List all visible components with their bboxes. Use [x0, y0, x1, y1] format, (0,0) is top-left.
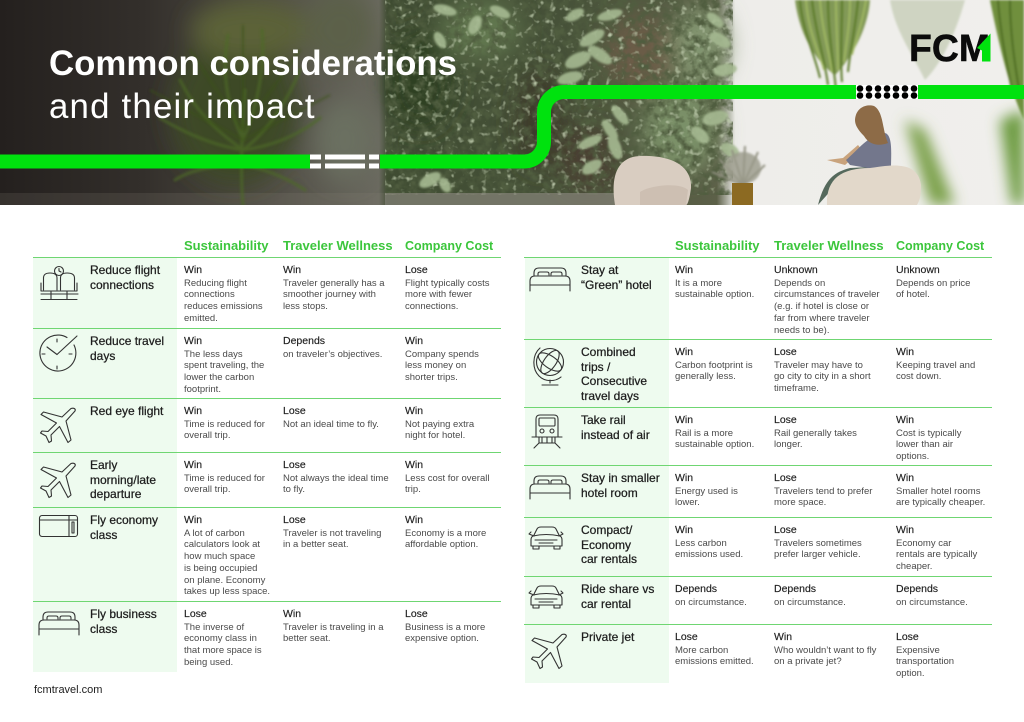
wellness cell: Travelers tend to prefer — [774, 486, 872, 497]
sustainability cell: that more space is — [184, 645, 262, 656]
icon: airport seats and clock — [40, 266, 78, 300]
sustainability cell: More carbon — [675, 645, 728, 656]
wellness cell: far from where traveler — [774, 313, 870, 324]
sustainability cell: Win — [675, 524, 693, 536]
cost cell — [405, 514, 486, 550]
label: class — [90, 528, 117, 542]
wellness cell: Lose — [774, 472, 797, 484]
wellness cell: Depends on — [774, 278, 825, 289]
cost cell — [405, 458, 489, 495]
sustainability cell — [184, 514, 270, 597]
sustainability cell: overall trip. — [184, 484, 230, 495]
sustainability cell: Time is reduced for — [184, 473, 265, 484]
sustainability cell: Lose — [184, 608, 207, 620]
wall leaves — [417, 2, 742, 194]
sustainability cell: Reducing flight — [184, 278, 247, 289]
label: Take rail — [581, 413, 626, 427]
wellness cell: Rail generally takes — [774, 428, 857, 439]
sustainability cell: how much space — [184, 551, 255, 562]
wellness cell — [774, 346, 871, 395]
wellness cell: go city to city in a short — [774, 371, 871, 382]
left column headers: Company Cost — [405, 239, 493, 253]
icon: airplane — [531, 633, 567, 669]
sustainability cell — [675, 346, 753, 383]
woman on chair — [818, 166, 891, 205]
wellness cell — [774, 414, 857, 451]
label: trips / — [581, 360, 610, 374]
title: Common considerations — [49, 44, 457, 83]
sustainability cell: Win — [184, 334, 202, 346]
FCM logo: FCM — [909, 28, 990, 70]
icon: boarding pass — [38, 515, 78, 537]
sustainability cell: Energy used is — [675, 486, 738, 497]
potted plant — [712, 146, 765, 185]
wellness cell: Lose — [774, 524, 797, 536]
cost cell: cheaper. — [896, 561, 932, 572]
sustainability cell: Lose — [675, 630, 698, 642]
cost cell: Economy is a more — [405, 528, 486, 539]
wellness cell — [283, 608, 384, 644]
sustainability cell: The less days — [184, 349, 243, 360]
sustainability cell: Win — [675, 414, 693, 426]
wellness cell: timeframe. — [774, 383, 819, 394]
sustainability cell — [675, 414, 754, 451]
label: “Green” hotel — [581, 278, 652, 292]
wellness cell — [283, 404, 379, 430]
icon: train — [531, 414, 563, 450]
wellness cell: Travelers sometimes — [774, 538, 862, 549]
wellness cell: in a better seat. — [283, 539, 348, 550]
sustainability cell: Win — [184, 514, 202, 526]
wellness cell: Traveler generally has a — [283, 278, 385, 289]
wellness cell: Unknown — [774, 264, 818, 276]
label: Reduce travel — [90, 334, 164, 348]
cost cell: of hotel. — [896, 289, 930, 300]
wellness cell — [774, 472, 872, 509]
sustainability cell: lower the carbon — [184, 372, 254, 383]
sustainability cell: connections — [184, 289, 235, 300]
label: Combined — [581, 345, 636, 359]
row: Reduce flight connections — [33, 257, 501, 328]
sustainability cell: sustainable option. — [675, 289, 754, 300]
cost cell — [405, 264, 490, 312]
right column headers: Company Cost — [896, 239, 984, 253]
label: departure — [90, 487, 141, 501]
wellness cell: to fly. — [283, 484, 305, 495]
cost cell: Win — [405, 334, 423, 346]
cost cell: Smaller hotel rooms — [896, 486, 980, 497]
label: days — [90, 348, 115, 362]
label: Fly business — [90, 607, 157, 621]
cost cell: Flight typically costs — [405, 278, 489, 289]
icon: bed — [529, 475, 571, 500]
sustainability cell: Win — [675, 264, 693, 276]
sustainability cell: Rail is a more — [675, 428, 733, 439]
label: connections — [90, 278, 154, 292]
cost cell: Win — [405, 404, 423, 416]
cost cell: Company spends — [405, 349, 479, 360]
label — [90, 458, 156, 501]
row: Compact/Economy car rentals — [524, 517, 992, 576]
cost cell: Depends — [896, 582, 938, 594]
sustainability cell — [675, 472, 738, 509]
wellness cell: Traveler is traveling in a — [283, 622, 384, 633]
title: and their impact — [49, 87, 316, 126]
label: instead of air — [581, 428, 650, 442]
wellness cell: less stops. — [283, 301, 328, 312]
cost cell — [896, 524, 977, 573]
cost cell: Lose — [896, 630, 919, 642]
label — [581, 471, 673, 500]
sustainability cell: A lot of carbon — [184, 528, 245, 539]
left column headers: Sustainability — [184, 238, 269, 253]
sustainability cell: footprint. — [184, 384, 221, 395]
row: Red eye flight — [33, 398, 501, 452]
cost cell: rentals are typically — [896, 549, 977, 560]
wellness cell: prefer larger vehicle. — [774, 549, 861, 560]
sustainability cell: It is a more — [675, 278, 722, 289]
label — [90, 334, 164, 363]
label: Reduce flight — [90, 263, 160, 277]
cost cell: shorter trips. — [405, 372, 458, 383]
label — [581, 263, 652, 292]
wellness cell: on traveler’s objectives. — [283, 349, 382, 360]
sustainability cell — [675, 264, 754, 300]
row: Reduce travel days — [33, 328, 501, 398]
sustainability cell: calculators look at — [184, 539, 260, 550]
low-frequency colour masses — [170, 0, 728, 195]
row: Private jet — [524, 624, 992, 683]
fern fronds left — [160, 30, 320, 205]
cost cell — [896, 264, 970, 300]
sustainability cell: Win — [184, 404, 202, 416]
label — [90, 263, 160, 292]
cost cell: Depends on price — [896, 278, 970, 289]
black dotted segment — [856, 85, 918, 99]
cost cell: options. — [896, 451, 929, 462]
wellness cell — [283, 458, 389, 495]
wellness cell: better seat. — [283, 633, 331, 644]
white dashed segment — [310, 154, 379, 168]
right column headers: Traveler Wellness — [774, 238, 884, 253]
sustainability cell: Win — [675, 346, 693, 358]
wellness cell — [774, 582, 846, 608]
label: Compact/ — [581, 523, 632, 537]
wellness cell — [774, 630, 876, 668]
right column headers: Sustainability — [675, 238, 760, 253]
left column headers: Traveler Wellness — [283, 238, 393, 253]
sustainability cell: on plane. Economy — [184, 574, 265, 586]
wellness cell: Traveler is not traveling — [283, 528, 381, 539]
sustainability cell — [184, 334, 264, 395]
cost cell: Win — [896, 524, 914, 536]
label: Private jet — [581, 630, 634, 644]
hero photo banner with green wall and seated woman — [0, 0, 1024, 205]
wellness cell: Who wouldn’t want to fly — [774, 645, 876, 656]
label — [581, 523, 673, 566]
wellness cell: Traveler may have to — [774, 360, 863, 371]
wellness cell: Win — [774, 630, 792, 642]
row: Combined trips — [524, 339, 992, 407]
cost cell: Expensive — [896, 645, 940, 656]
wellness cell: Win — [283, 264, 301, 276]
label — [581, 345, 647, 403]
sustainability cell: lower. — [675, 497, 700, 508]
row: Stay at Green hotel — [524, 257, 992, 339]
icon: clock with check mark — [39, 334, 78, 372]
cost cell — [896, 582, 968, 608]
row: Ride share vs car rental — [524, 576, 992, 624]
icon: car — [528, 526, 564, 550]
sustainability cell: sustainable option. — [675, 439, 754, 450]
sustainability cell: emissions emitted. — [675, 656, 754, 667]
sustainability cell — [675, 524, 743, 561]
sustainability cell: generally less. — [675, 371, 736, 382]
cost cell: Business is a more — [405, 622, 485, 633]
icon: bed — [38, 612, 80, 636]
lounge chair — [614, 156, 691, 205]
label: Economy — [581, 538, 631, 552]
label — [90, 607, 157, 636]
icon: car — [528, 585, 564, 609]
cost cell: Less cost for overall — [405, 473, 489, 484]
sustainability cell: reduces emissions — [184, 301, 263, 312]
label: class — [90, 622, 117, 636]
cost cell: Not paying extra — [405, 419, 474, 430]
wellness cell: circumstances of traveler — [774, 289, 880, 300]
row: Early morning/late departure — [33, 452, 501, 507]
label: Stay in smaller — [581, 471, 660, 485]
sustainability cell: Win — [184, 264, 202, 276]
hanging plants — [795, 0, 1024, 120]
sustainability cell: being used. — [184, 657, 233, 668]
label: hotel room — [581, 486, 638, 500]
right column headers — [675, 238, 984, 253]
cost cell: Keeping travel and — [896, 360, 975, 371]
sustainability cell: emitted. — [184, 313, 218, 324]
wellness cell: needs to be). — [774, 324, 829, 336]
wellness cell: Lose — [283, 404, 306, 416]
wellness cell: Win — [283, 608, 301, 620]
cost cell — [896, 414, 961, 463]
cost cell: transportation — [896, 656, 954, 667]
cost cell: Lose — [405, 264, 428, 276]
wellness cell: on a private jet? — [774, 656, 842, 667]
cost cell: less money on — [405, 360, 466, 371]
sustainability cell: emissions used. — [675, 549, 743, 560]
icon: airplane — [40, 462, 76, 498]
cost cell: Win — [896, 346, 914, 358]
sustainability cell: Win — [675, 472, 693, 484]
cost cell: option. — [896, 668, 925, 679]
cost cell: Win — [896, 472, 914, 484]
sustainability cell: Carbon footprint is — [675, 360, 753, 371]
icon: bed — [529, 268, 571, 292]
label: Red eye flight — [90, 404, 163, 418]
cost cell: night for hotel. — [405, 430, 465, 441]
wellness cell: Not always the ideal time — [283, 473, 389, 484]
cost cell — [405, 608, 485, 644]
cost cell: expensive option. — [405, 633, 479, 644]
sustainability cell — [184, 608, 262, 668]
cost cell: Win — [405, 514, 423, 526]
cost cell: affordable option. — [405, 539, 478, 550]
cost cell: Win — [405, 458, 423, 470]
cost cell: trip. — [405, 484, 421, 495]
cost cell: are typically cheaper. — [896, 497, 985, 508]
sustainability cell: overall trip. — [184, 430, 230, 441]
label: Ride share vs — [581, 582, 654, 596]
title — [49, 44, 457, 126]
wellness cell: on circumstance. — [774, 597, 846, 608]
sustainability cell: is being occupied — [184, 563, 257, 574]
label: morning/late — [90, 472, 156, 486]
label — [581, 582, 673, 611]
sustainability cell — [184, 264, 263, 324]
cost cell — [405, 334, 479, 383]
wellness cell: Not an ideal time to fly. — [283, 419, 379, 430]
sustainability cell: takes up less space. — [184, 586, 270, 597]
label: Fly economy — [90, 513, 158, 527]
cost cell: more with fewer — [405, 289, 472, 300]
cost cell: on circumstance. — [896, 597, 968, 608]
sustainability cell — [184, 404, 265, 441]
wellness cell: Depends — [283, 334, 325, 346]
wellness cell: Lose — [774, 346, 797, 358]
label: car rental — [581, 596, 631, 610]
cost cell — [896, 630, 954, 680]
cost cell: connections. — [405, 301, 458, 312]
cost cell: cost down. — [896, 371, 941, 382]
icon: globe on stand — [533, 347, 564, 386]
label: car rentals — [581, 552, 637, 566]
sustainability cell: Depends — [675, 582, 717, 594]
wellness cell — [774, 524, 862, 561]
label: Stay at — [581, 263, 618, 277]
cost cell: Economy car — [896, 538, 951, 549]
cost cell: Win — [896, 414, 914, 426]
wellness cell: Lose — [774, 414, 797, 426]
cost cell: Lose — [405, 608, 428, 620]
sustainability cell: Time is reduced for — [184, 419, 265, 430]
wellness cell — [774, 264, 880, 336]
label: Early — [90, 458, 117, 472]
cost cell: Cost is typically — [896, 428, 961, 439]
row: Fly economy class — [33, 507, 501, 601]
row: Fly business class — [33, 601, 501, 672]
sustainability cell: spent traveling, the — [184, 360, 264, 371]
sustainability cell: Less carbon — [675, 538, 727, 549]
label — [581, 413, 673, 442]
row: Take rail instead of air — [524, 407, 992, 465]
sustainability cell — [675, 582, 747, 608]
sustainability cell — [184, 458, 265, 495]
sustainability cell: The inverse of — [184, 622, 244, 633]
wellness cell: (e.g. if hotel is close or — [774, 301, 869, 312]
wellness cell: Lose — [283, 514, 306, 526]
cost cell: Unknown — [896, 264, 940, 276]
wellness cell — [283, 334, 382, 360]
cost cell — [896, 472, 985, 509]
row: Stay in smaller hotel room — [524, 465, 992, 517]
sustainability cell: Win — [184, 458, 202, 470]
wellness cell: Lose — [283, 458, 306, 470]
cost cell: lower than air — [896, 439, 953, 450]
sustainability cell: economy class in — [184, 633, 257, 644]
wellness cell: longer. — [774, 439, 803, 450]
left column headers — [184, 238, 493, 253]
icon: airplane — [40, 408, 76, 444]
sustainability cell: on circumstance. — [675, 597, 747, 608]
label — [90, 513, 158, 542]
wellness cell: smoother journey with — [283, 289, 376, 300]
sustainability cell — [675, 630, 754, 668]
wellness cell: more space. — [774, 497, 826, 508]
footer url: fcmtravel.com — [34, 684, 102, 696]
label: travel days — [581, 388, 639, 402]
green route line — [0, 92, 1024, 162]
cost cell — [405, 404, 474, 441]
wellness cell — [283, 264, 385, 312]
label: Consecutive — [581, 374, 647, 388]
wellness cell: Depends — [774, 582, 816, 594]
cost cell — [896, 346, 975, 383]
wellness cell — [283, 514, 381, 550]
